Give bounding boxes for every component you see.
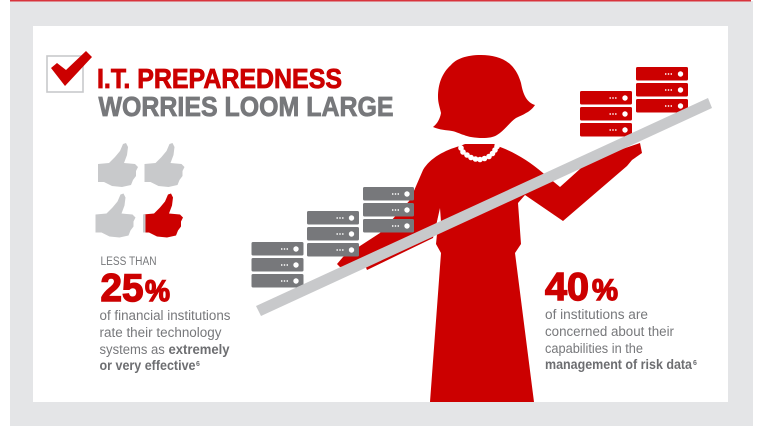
stat: 40%: concerned about their (545, 324, 674, 339)
stat: less than 25%: systems as extremely (100, 342, 230, 357)
stat: 40%: capabilities in the (545, 341, 643, 356)
stat: less than 25%: 6 (196, 361, 200, 368)
pearl necklace (458, 144, 500, 162)
sleeve gap (436, 208, 441, 226)
stat: 40%: of institutions are (545, 307, 648, 322)
top red rule (10, 0, 751, 2)
stat: less than 25%: 25 (100, 267, 144, 310)
stat: 40% (545, 266, 697, 372)
server stack: grey middle (307, 211, 359, 256)
stat: 40%: % (592, 274, 618, 307)
title: WORRIES LOOM LARGE (98, 91, 394, 122)
stat: 40%: management of risk data (545, 357, 692, 372)
stat: 40%: 40 (545, 266, 589, 309)
stat: less than 25% (100, 256, 231, 373)
tilted balance beam (256, 98, 712, 316)
white content panel (33, 26, 728, 402)
stat: 40%: 6 (693, 360, 697, 367)
icon: checkbox with check mark (47, 51, 92, 92)
server stack: grey low (252, 242, 304, 288)
stat: less than 25%: or very effective (100, 358, 196, 373)
woman figure (337, 55, 642, 402)
title: I.T. PREPAREDNESS (97, 63, 342, 94)
stat: less than 25%: of financial institutions (100, 308, 231, 323)
body and arms (337, 143, 642, 402)
server stack: red right (636, 67, 688, 112)
stat: less than 25%: LESS THAN (100, 256, 156, 268)
server stack: grey high (363, 187, 414, 232)
head and hair (433, 55, 535, 138)
stat: less than 25%: % (145, 275, 170, 308)
title (97, 63, 394, 122)
stat: less than 25%: rate their technology (100, 325, 222, 340)
icon: four thumbs up, one red (96, 143, 184, 238)
server stack: red left (580, 91, 632, 136)
